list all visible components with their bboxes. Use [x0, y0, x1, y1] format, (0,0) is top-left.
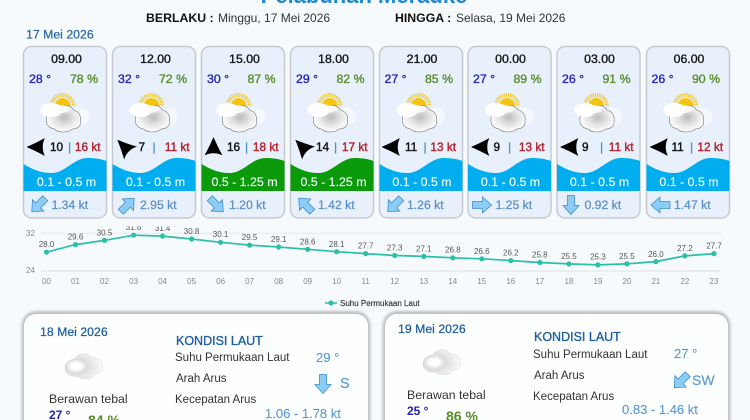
- panel: forecast 06.00: 11: [672, 140, 684, 154]
- wave height: [112, 158, 196, 191]
- icon: current arrow: [382, 193, 407, 217]
- icon: current direction: [669, 369, 693, 393]
- panel: forecast 15.00: 16: [227, 140, 241, 154]
- line chart: sea surface temperature: [26, 223, 722, 286]
- icon: cloud: [65, 354, 103, 379]
- panel: forecast 03.00: 11 kt: [609, 140, 634, 154]
- panel: forecast 00.00: 1.25 kt: [496, 198, 533, 212]
- panel: forecast 00.00: |: [508, 140, 511, 154]
- panel: forecast 09.00: 16 kt: [75, 140, 101, 154]
- line chart: sea surface temperature: 28.0: [39, 240, 55, 249]
- line chart: sea surface temperature: 29.6: [68, 232, 84, 242]
- panel: 19 Mei 2026 outlook: 0.83 - 1.46 kt: [622, 402, 698, 417]
- panel: 18 Mei 2026 outlook: 29 °: [316, 350, 339, 365]
- icon: partly cloudy: [308, 95, 356, 132]
- icon: wind arrow: [27, 138, 44, 156]
- panel: 18 Mei 2026 outlook: Kecepatan Arus: [175, 394, 256, 406]
- date heading: 17 Mei 2026: [26, 28, 94, 42]
- panel: forecast 15.00: 30 °: [207, 72, 229, 86]
- panel: forecast 03.00: |: [600, 140, 603, 154]
- panel: forecast 15.00: [202, 46, 284, 218]
- wave height: [646, 158, 730, 191]
- panel: forecast 12.00: 0.1 - 0.5 m: [126, 175, 185, 189]
- line chart: sea surface temperature: 23: [710, 277, 719, 286]
- line chart: sea surface temperature: 25.3: [590, 252, 606, 262]
- panel: forecast 12.00: 11 kt: [165, 140, 190, 154]
- panel: forecast 15.00: 87 %: [247, 72, 276, 86]
- panel: forecast 21.00: 11: [405, 140, 417, 154]
- panel: 19 Mei 2026 outlook: 19 Mei 2026: [398, 322, 466, 336]
- icon: wind arrow: [112, 134, 136, 159]
- panel: forecast 21.00: 27 °: [384, 72, 407, 86]
- line chart: sea surface temperature: 10: [332, 277, 342, 286]
- icon: partly cloudy: [216, 95, 265, 132]
- panel: forecast 18.00: [290, 46, 374, 218]
- wave height: [380, 158, 462, 191]
- line chart: sea surface temperature: 27.7: [358, 242, 374, 250]
- line chart: sea surface temperature: 03: [129, 277, 139, 286]
- validity start: BERLAKU :: [146, 11, 214, 25]
- line chart: sea surface temperature: 16: [506, 277, 516, 286]
- line chart: sea surface temperature: 14: [448, 277, 458, 286]
- panel: forecast 18.00: 1.42 kt: [318, 198, 355, 212]
- panel: forecast 18.00: |: [334, 140, 337, 154]
- panel: forecast 15.00: 15.00: [229, 52, 260, 66]
- line chart: sea surface temperature: 26.8: [445, 246, 461, 254]
- panel: forecast 09.00: 0.1 - 0.5 m: [37, 175, 96, 189]
- line chart: sea surface temperature: 28.1: [329, 240, 345, 249]
- panel: forecast 21.00: 85 %: [425, 72, 453, 86]
- panel: forecast 21.00: 1.26 kt: [407, 198, 444, 212]
- panel: 18 Mei 2026 outlook: [22, 312, 370, 420]
- icon: wind arrow: [290, 134, 314, 159]
- panel: 19 Mei 2026 outlook: SW: [692, 372, 715, 388]
- validity end: HINGGA :: [395, 11, 451, 25]
- panel: forecast 03.00: 26 °: [562, 72, 584, 86]
- panel: forecast 09.00: 1.34 kt: [52, 198, 89, 212]
- line chart: sea surface temperature: 06: [216, 277, 226, 286]
- panel: forecast 18.00: 17 kt: [342, 140, 368, 154]
- panel: forecast 09.00: 09.00: [51, 52, 82, 66]
- panel: forecast 09.00: [24, 46, 106, 218]
- line chart: sea surface temperature: 12: [390, 277, 400, 286]
- line chart: sea surface temperature: 19: [593, 277, 603, 286]
- panel: forecast 00.00: 0.1 - 0.5 m: [481, 175, 540, 189]
- line chart: sea surface temperature: 00: [42, 277, 51, 286]
- line chart: sea surface temperature: 29.5: [242, 233, 258, 242]
- panel: 19 Mei 2026 outlook: Berawan tebal: [407, 388, 486, 402]
- wave height: [290, 158, 374, 191]
- panel: 18 Mei 2026 outlook: Arah Arus: [176, 373, 227, 385]
- line chart: sea surface temperature: 32: [26, 229, 35, 238]
- panel: 19 Mei 2026 outlook: 27 °: [674, 346, 697, 361]
- panel: forecast 06.00: 90 %: [692, 72, 720, 86]
- line chart: sea surface temperature: 27.1: [416, 244, 432, 254]
- icon: partly cloudy: [574, 95, 622, 132]
- panel: forecast 21.00: 0.1 - 0.5 m: [392, 175, 452, 189]
- panel: forecast 21.00: [380, 46, 462, 218]
- panel: forecast 00.00: 00.00: [495, 52, 526, 66]
- line chart: sea surface temperature: 26.6: [474, 247, 490, 256]
- panel: forecast 18.00: 29 °: [296, 72, 318, 86]
- line chart: sea surface temperature: 08: [274, 277, 284, 286]
- panel: forecast 12.00: |: [152, 140, 156, 154]
- panel: forecast 21.00: 13 kt: [430, 140, 457, 154]
- panel: forecast 12.00: 2.95 kt: [140, 198, 177, 212]
- line chart: sea surface temperature: 29.1: [271, 235, 287, 244]
- panel: forecast 00.00: 13 kt: [519, 140, 545, 154]
- validity end: Selasa, 19 Mei 2026: [456, 11, 566, 25]
- wave height: [24, 158, 106, 191]
- panel: 19 Mei 2026 outlook: KONDISI LAUT: [534, 330, 621, 344]
- wave height: [468, 158, 551, 191]
- line chart: sea surface temperature: 22: [680, 277, 690, 286]
- icon: wind arrow: [472, 138, 489, 156]
- line chart: sea surface temperature: 27.7: [706, 242, 722, 250]
- validity end: [395, 11, 566, 25]
- panel: forecast 21.00: |: [424, 140, 427, 154]
- line chart: sea surface temperature: 13: [419, 277, 429, 286]
- icon: wind arrow: [560, 138, 578, 156]
- icon: current arrow: [115, 193, 140, 217]
- line chart: sea surface temperature: 26.2: [503, 248, 519, 258]
- panel: forecast 21.00: 21.00: [407, 52, 438, 66]
- line chart: sea surface temperature: 02: [100, 277, 109, 286]
- icon: current arrow: [472, 197, 492, 213]
- panel: forecast 06.00: 26 °: [652, 72, 674, 86]
- panel: forecast 09.00: 78 %: [70, 72, 98, 86]
- panel: forecast 15.00: 0.5 - 1.25 m: [211, 175, 278, 189]
- icon: partly cloudy: [664, 95, 712, 132]
- panel: 19 Mei 2026 outlook: Suhu Permukaan Laut: [533, 349, 648, 361]
- panel: forecast 03.00: [557, 46, 640, 218]
- panel: 19 Mei 2026 outlook: 25 °: [407, 404, 429, 418]
- icon: current direction: [315, 374, 331, 394]
- panel: forecast 09.00: 28 °: [29, 72, 51, 86]
- line chart: sea surface temperature: 31.6: [126, 223, 142, 232]
- icon: cloud: [423, 350, 461, 375]
- line chart: sea surface temperature: 18: [564, 277, 574, 286]
- panel: 19 Mei 2026 outlook: Arah Arus: [534, 370, 585, 382]
- panel: forecast 06.00: 06.00: [674, 52, 705, 66]
- line chart: sea surface temperature: 30.5: [97, 228, 113, 238]
- panel: forecast 18.00: 14: [316, 140, 330, 154]
- wave height: [202, 158, 284, 191]
- icon: current arrow: [563, 196, 579, 214]
- line chart: sea surface temperature: 09: [303, 277, 313, 286]
- panel: forecast 06.00: [646, 46, 730, 218]
- panel: 18 Mei 2026 outlook: KONDISI LAUT: [176, 334, 263, 348]
- panel: forecast 09.00: |: [68, 140, 71, 154]
- panel: forecast 06.00: 1.47 kt: [674, 198, 711, 212]
- validity start: Minggu, 17 Mei 2026: [218, 11, 330, 25]
- panel: forecast 00.00: 89 %: [513, 72, 542, 86]
- panel: 19 Mei 2026 outlook: [384, 312, 730, 420]
- line chart: sea surface temperature: 21: [651, 277, 661, 286]
- panel: forecast 06.00: |: [690, 140, 693, 154]
- panel: forecast 03.00: 0.92 kt: [584, 198, 622, 212]
- wave height: [557, 158, 640, 191]
- line chart: sea surface temperature: 27.2: [677, 244, 693, 253]
- line chart: sea surface temperature: 05: [187, 277, 197, 286]
- panel: 19 Mei 2026 outlook: Kecepatan Arus: [533, 391, 614, 403]
- panel: forecast 15.00: |: [245, 140, 248, 154]
- line chart: sea surface temperature: 25.8: [532, 250, 548, 260]
- panel: forecast 18.00: 82 %: [336, 72, 365, 86]
- line chart: sea surface temperature: 26.0: [648, 250, 664, 259]
- panel: forecast 03.00: 91 %: [602, 72, 631, 86]
- line chart: sea surface temperature: 07: [245, 277, 255, 286]
- line chart: sea surface temperature: 27.3: [387, 244, 403, 252]
- panel: forecast 00.00: 27 °: [473, 72, 495, 86]
- icon: wind arrow: [382, 138, 400, 156]
- chart legend: Suhu Permukaan Laut: [340, 299, 420, 308]
- icon: current arrow: [293, 193, 318, 217]
- icon: wind arrow: [650, 138, 668, 156]
- panel: forecast 18.00: 18.00: [318, 52, 349, 66]
- line chart: sea surface temperature: 01: [71, 277, 80, 286]
- panel: 18 Mei 2026 outlook: 18 Mei 2026: [40, 325, 108, 339]
- panel: forecast 12.00: [112, 46, 196, 218]
- icon: wind arrow: [205, 138, 222, 155]
- line chart: sea surface temperature: 25.5: [619, 252, 635, 261]
- panel: 18 Mei 2026 outlook: Berawan tebal: [49, 392, 128, 406]
- panel: forecast 15.00: 18 kt: [253, 140, 279, 154]
- panel: forecast 00.00: [468, 46, 551, 218]
- line chart: sea surface temperature: 25.5: [561, 252, 577, 261]
- line chart: sea surface temperature: 04: [158, 277, 168, 286]
- icon: partly cloudy: [130, 95, 178, 132]
- panel: forecast 06.00: 0.1 - 0.5 m: [659, 175, 719, 189]
- icon: partly cloudy: [396, 95, 445, 132]
- line chart: sea surface temperature: 31.4: [155, 224, 171, 233]
- panel: forecast 09.00: 10: [50, 140, 64, 154]
- line chart: sea surface temperature: 17: [535, 277, 545, 286]
- panel: forecast 12.00: 72 %: [159, 72, 187, 86]
- line chart: sea surface temperature: 24: [26, 266, 35, 275]
- icon: current arrow: [204, 193, 229, 217]
- panel: forecast 00.00: 9: [494, 140, 500, 154]
- panel: forecast 03.00: 9: [582, 140, 589, 154]
- panel: forecast 12.00: 7: [138, 140, 145, 154]
- panel: forecast 03.00: 03.00: [584, 52, 615, 66]
- icon: current arrow: [26, 193, 51, 217]
- line chart: sea surface temperature: 11: [362, 277, 370, 286]
- line chart: sea surface temperature: 30.1: [213, 230, 229, 239]
- icon: partly cloudy: [485, 95, 534, 132]
- icon: partly cloudy: [40, 95, 89, 132]
- line chart: sea surface temperature: 20: [622, 277, 632, 286]
- panel: 18 Mei 2026 outlook: S: [340, 376, 350, 392]
- validity start: [146, 11, 330, 25]
- panel: forecast 06.00: 12 kt: [697, 140, 724, 154]
- panel: forecast 18.00: 0.5 - 1.25 m: [300, 175, 367, 189]
- panel: forecast 12.00: 12.00: [140, 52, 171, 66]
- panel: forecast 12.00: 32 °: [118, 72, 140, 86]
- line chart: sea surface temperature: 28.6: [300, 238, 316, 246]
- icon: current arrow: [651, 197, 670, 213]
- panel: forecast 15.00: 1.20 kt: [229, 198, 266, 212]
- line chart: sea surface temperature: 15: [477, 277, 487, 286]
- panel: 18 Mei 2026 outlook: Suhu Permukaan Laut: [175, 352, 290, 364]
- line chart: sea surface temperature: 30.8: [184, 227, 200, 236]
- panel: forecast 03.00: 0.1 - 0.5 m: [570, 175, 629, 189]
